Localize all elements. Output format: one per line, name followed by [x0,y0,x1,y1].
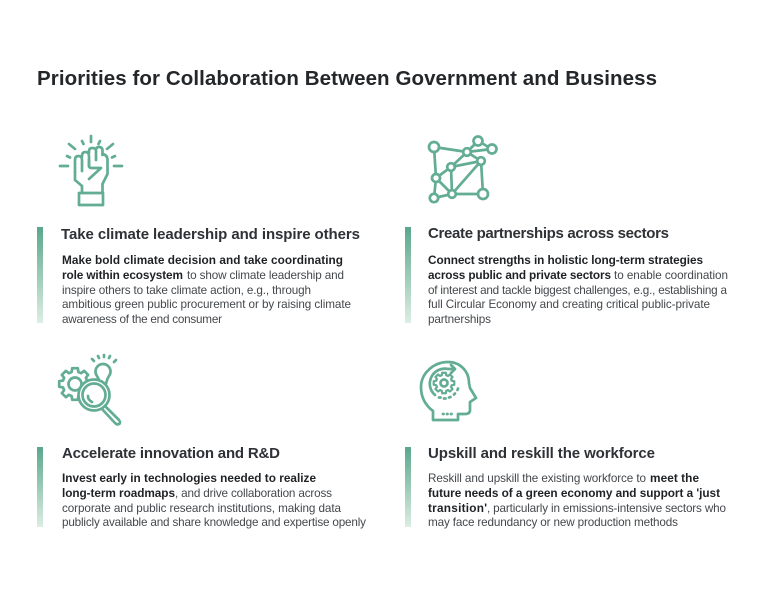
panel: partnerships [405,136,728,326]
text block: Invest early in technologies needed to realize [62,471,316,485]
heading: Create partnerships across sectors [428,225,669,242]
icon: network [429,136,496,202]
text block: corporate and public research institutions, making data [62,502,341,515]
accent bar [37,447,43,527]
panel: climate leadership [37,136,360,326]
text block: to show climate leadership and [187,269,344,282]
text block: full Circular Economy and creating critical public-private [428,298,710,311]
text block: of interest and tackle biggest challenges, e.g., establishing a [428,284,727,297]
icon: raised fist [60,136,122,205]
text block: to enable coordination [614,269,728,282]
text block: , particularly in emissions-intensive sectors who [487,502,726,515]
text block: ambitious green public procurement or by raising climate [62,298,351,311]
accent bar [405,227,411,323]
text block [62,253,351,326]
accent bar [405,447,411,527]
accent bar [37,227,43,323]
text block: publicly available and share knowledge and expertise openly [62,516,366,529]
text block: meet the [650,471,699,485]
panel: workforce [405,362,726,529]
text block [428,471,726,529]
text block [428,253,728,326]
text block: future needs of a green economy and support a 'just [428,486,720,500]
heading: Accelerate innovation and R&D [62,445,280,462]
text block [62,471,366,529]
text block: long-term roadmaps [62,486,175,500]
text block: Reskill and upskill the existing workforce to [428,472,646,485]
text block: awareness of the end consumer [62,313,222,326]
text block: across public and private sectors [428,268,611,282]
text block: Connect strengths in holistic long-term strategies [428,253,703,267]
text block: role within ecosystem [62,268,183,282]
text block: partnerships [428,313,491,326]
heading: Take climate leadership and inspire others [61,226,360,243]
title: Priorities for Collaboration Between Government and Business [37,67,657,90]
text block: transition' [428,501,487,515]
heading: Upskill and reskill the workforce [428,445,655,462]
text block: may face redundancy or new production methods [428,516,678,529]
text block: Make bold climate decision and take coordinating [62,253,343,267]
panel: innovation [37,355,366,529]
icon: gear, magnifier and light bulb [59,355,120,424]
icon: head with gear [421,362,476,420]
text block: inspire others to take climate action, e.g., through [62,284,311,297]
text block: , and drive collaboration across [175,487,332,500]
